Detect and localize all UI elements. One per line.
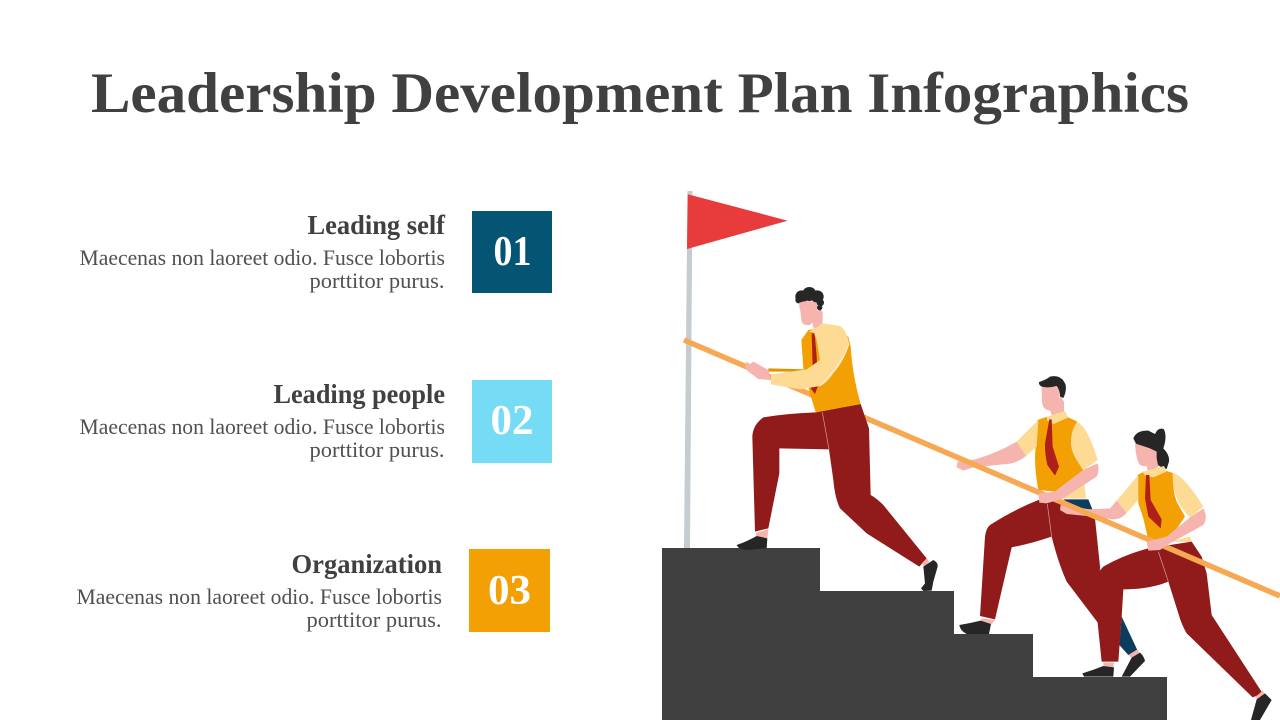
panel: step 01 leading self (80, 210, 552, 293)
hands and forearms gripping the pole (1038, 463, 1206, 551)
heading: organization: Organization (292, 549, 442, 579)
curly hair (795, 287, 824, 310)
text block: step 02 description (80, 414, 445, 462)
number badge 01: 01 (494, 229, 532, 275)
pole held by the team (684, 340, 1280, 596)
text block: step 01 description: Maecenas non laoreet odio. Fusce lobortis (80, 245, 445, 270)
heading: leading people: Leading people (274, 379, 445, 409)
text block: step 01 description: porttitor purus. (310, 268, 444, 293)
number badge 03 (469, 549, 550, 632)
number badge 03: 03 (488, 568, 531, 614)
panel: step 03 organization (76, 549, 550, 632)
figure: second man (957, 376, 1145, 677)
figure: lead man (737, 287, 938, 591)
number badge 02: 02 (490, 398, 534, 444)
text block: step 02 description: porttitor purus. (310, 437, 444, 462)
icon: flag on pole (684, 191, 788, 548)
figure: woman (1060, 429, 1272, 720)
staircase (662, 548, 1167, 720)
panel: step 02 leading people (80, 379, 552, 463)
text block: step 03 description (76, 584, 442, 632)
text block: step 03 description: Maecenas non laoreet odio. Fusce lobortis (76, 584, 442, 609)
number badge 01 (472, 211, 552, 293)
heading: leading self: Leading self (308, 210, 446, 240)
number badge 02 (472, 380, 552, 463)
text block: step 03 description: porttitor purus. (306, 607, 442, 632)
text block: step 01 description (80, 245, 445, 293)
text block: step 02 description: Maecenas non laoreet odio. Fusce lobortis (80, 414, 445, 439)
title: Leadership Development Plan Infographics (91, 62, 1189, 125)
